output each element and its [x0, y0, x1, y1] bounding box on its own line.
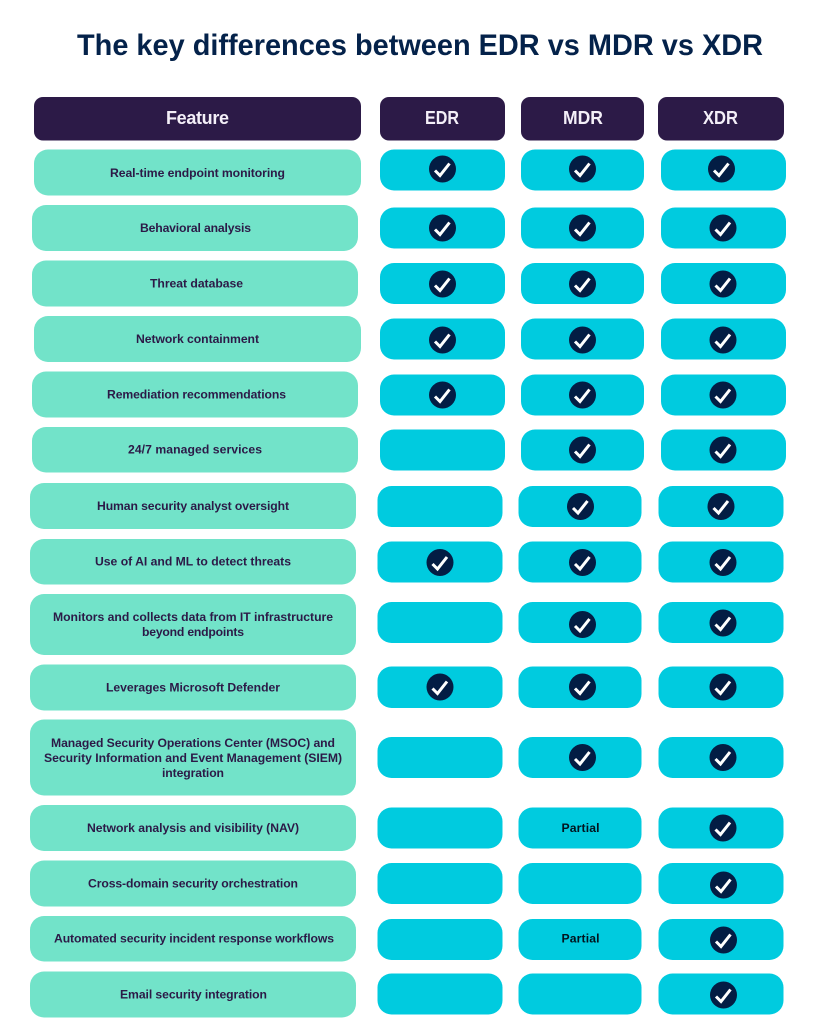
row: Automated security incident response workflows	[30, 916, 784, 962]
header: XDR: XDR	[703, 108, 738, 128]
row: Managed Security Operations Center and SIEM integration	[30, 720, 784, 796]
row: Cross-domain security orchestration	[30, 860, 784, 906]
row: Leverages Microsoft Defender	[30, 664, 784, 710]
row: Behavioral analysis	[32, 205, 786, 251]
row: Threat database: Threat database	[150, 276, 243, 290]
row: Email security integration: Email security integration	[120, 988, 267, 1002]
row: Leverages Microsoft Defender: Leverages Microsoft Defender	[106, 680, 280, 694]
row: Monitors and collects data from IT infrastructure beyond endpoints: beyond endpoints	[142, 625, 244, 639]
header: EDR: EDR	[425, 108, 459, 128]
row: Human security analyst oversight: Human security analyst oversight	[97, 499, 289, 513]
row: Monitors and collects data from IT infrastructure beyond endpoints	[30, 594, 784, 655]
row: Network containment	[34, 316, 786, 362]
row: 24/7 managed services: 24/7 managed services	[128, 442, 262, 456]
row: Real-time endpoint monitoring: Real-time endpoint monitoring	[110, 166, 285, 180]
row: Real-time endpoint monitoring	[34, 150, 786, 196]
row: Email security integration	[30, 972, 784, 1018]
row: Remediation recommendations: Remediation recommendations	[107, 388, 286, 402]
row: Behavioral analysis: Behavioral analysis	[140, 221, 251, 235]
row: Remediation recommendations	[32, 372, 786, 418]
row: Monitors and collects data from IT infrastructure beyond endpoints: Monitors and collects data from IT infrastructure	[53, 610, 333, 624]
row: Use of AI and ML to detect threats	[30, 539, 784, 584]
row: Threat database	[32, 260, 786, 306]
row: 24/7 managed services	[32, 427, 786, 472]
header: MDR	[521, 97, 644, 140]
row: Automated security incident response workflows: Partial	[562, 932, 600, 946]
header: Feature: Feature	[166, 108, 229, 128]
row: Human security analyst oversight	[30, 483, 784, 529]
table header row	[34, 97, 784, 140]
row: Automated security incident response workflows: Automated security incident response workflows	[54, 932, 334, 946]
row: Cross-domain security orchestration: Cross-domain security orchestration	[88, 876, 298, 890]
header: EDR	[380, 97, 505, 140]
row: Network analysis and visibility (NAV): Partial	[562, 821, 600, 835]
row: Network analysis and visibility (NAV): Network analysis and visibility (NAV)	[87, 821, 299, 835]
header: Feature	[34, 97, 361, 140]
row: Network analysis and visibility (NAV)	[30, 805, 784, 851]
row: Managed Security Operations Center and SIEM integration: Security Information and Event Management (SIEM)	[44, 751, 342, 765]
row: Use of AI and ML to detect threats: Use of AI and ML to detect threats	[95, 554, 291, 568]
title: The key differences between EDR vs MDR vs XDR	[77, 29, 763, 62]
header: MDR: MDR	[563, 108, 603, 128]
header: XDR	[658, 97, 784, 140]
row: Managed Security Operations Center and SIEM integration: Managed Security Operations Center (MSOC) and	[51, 736, 335, 750]
row: Network containment: Network containment	[136, 332, 259, 346]
row: Managed Security Operations Center and SIEM integration: integration	[162, 766, 224, 780]
